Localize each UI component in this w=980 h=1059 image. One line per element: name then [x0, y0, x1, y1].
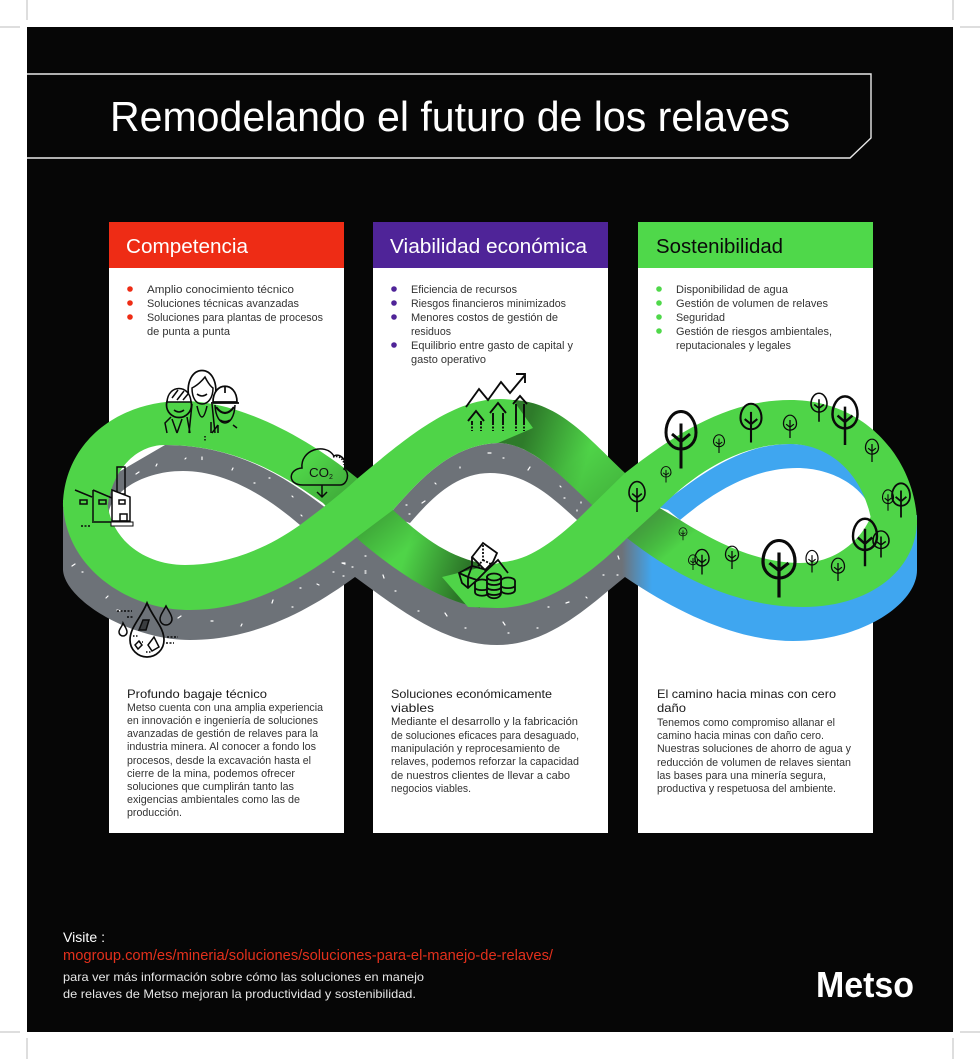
icon: growth chart — [466, 374, 527, 431]
bullet list: sostenibilidad: reputacionales y legales — [676, 340, 791, 352]
footer text: de relaves de Metso mejoran la productividad y sostenibilidad. — [63, 987, 416, 1001]
text block: soluciones economicamente viables — [391, 687, 579, 795]
footer text — [63, 930, 554, 1001]
text block: profundo bagaje: procesos, desde la excavación hasta el — [127, 755, 311, 767]
ribbon: white specks — [72, 453, 619, 633]
text block: soluciones economicamente viables: viables — [391, 701, 434, 715]
header: sostenibilidad — [638, 222, 873, 268]
bullet list: competencia: Amplio conocimiento técnico — [147, 284, 294, 296]
text block: camino hacia minas con cero dano: El camino hacia minas con cero — [657, 687, 836, 701]
title: Remodelando el futuro de los relaves — [110, 93, 790, 140]
bullet list: viabilidad: gasto operativo — [411, 354, 486, 366]
text block: profundo bagaje: industria minera. Al conocer a fondo los — [127, 741, 316, 753]
ribbon: green strip left loop falling — [63, 401, 480, 608]
header: competencia — [109, 222, 344, 268]
header: sostenibilidad: Sostenibilidad — [656, 236, 783, 258]
ribbon: green strip top arc falling to right loop — [498, 400, 917, 607]
ribbon: gray outer wall — [63, 507, 660, 645]
bullet list: viabilidad: residuos — [411, 326, 451, 338]
icon: people — [165, 370, 239, 442]
text block: soluciones economicamente viables: Soluciones económicamente — [391, 687, 552, 701]
icon: water drops with rocks — [117, 603, 178, 657]
text block: soluciones economicamente viables: negocios viables. — [391, 783, 471, 795]
text block: camino hacia minas con cero dano: productiva y respetuosa del ambiente. — [657, 783, 836, 795]
text block: soluciones economicamente viables: de nuestros clientes de llevar a cabo — [391, 770, 570, 782]
panel: sostenibilidad — [638, 222, 873, 833]
text block: camino hacia minas con cero dano: las bases para una minería segura, — [657, 770, 826, 782]
bullet list: sostenibilidad: Disponibilidad de agua — [676, 284, 789, 296]
text block: camino hacia minas con cero dano: daño — [657, 701, 686, 715]
icon: trees — [629, 393, 910, 598]
icon: CO2 cloud: CO — [309, 465, 329, 480]
text block: soluciones economicamente viables: de soluciones eficaces para desaguado, — [391, 730, 579, 742]
ribbon: gray inner wall middle — [385, 443, 600, 523]
text block: camino hacia minas con cero dano — [657, 687, 851, 795]
text block: profundo bagaje — [127, 687, 324, 819]
bullet list: viabilidad: Menores costos de gestión de — [411, 312, 558, 324]
bullet list: viabilidad: Equilibrio entre gasto de capital y — [411, 340, 573, 352]
icon: rocks and coins — [459, 543, 515, 598]
footer text: para ver más información sobre cómo las soluciones en manejo — [63, 970, 424, 984]
bullet list: competencia: Soluciones para plantas de procesos — [147, 312, 323, 324]
icon: CO2 cloud — [291, 449, 347, 497]
header: viabilidad economica — [373, 222, 608, 268]
text block: profundo bagaje: avanzadas de gestión de relaves para la — [127, 728, 319, 740]
bullet list: sostenibilidad: Gestión de volumen de relaves — [676, 298, 828, 310]
text block: profundo bagaje: producción. — [127, 807, 182, 819]
text block: soluciones economicamente viables: Mediante el desarrollo y la fabricación — [391, 716, 578, 728]
text block: profundo bagaje: en innovación e ingeniería de soluciones — [127, 715, 318, 727]
logo: Metso: Metso — [816, 964, 914, 1005]
bullet list: sostenibilidad: Seguridad — [676, 312, 725, 324]
ribbon: green strip bottom arc rising to right loop — [442, 400, 917, 608]
ribbon: green strip left loop rising — [63, 399, 533, 610]
footer text: Visite : — [63, 930, 105, 945]
text block: camino hacia minas con cero dano: Tenemos como compromiso allanar el — [657, 717, 835, 729]
bullet list: competencia — [127, 284, 323, 338]
header: viabilidad economica: Viabilidad económica — [390, 236, 588, 258]
text block: profundo bagaje: soluciones que cumplirán tanto las — [127, 781, 294, 793]
bullet list: viabilidad — [391, 284, 573, 366]
text block: profundo bagaje: cierre de la mina, podemos ofrecer — [127, 768, 295, 780]
bullet list: viabilidad: Eficiencia de recursos — [411, 284, 517, 296]
text block: soluciones economicamente viables: relaves, podemos reforzar la capacidad — [391, 756, 579, 768]
icon: factory — [75, 467, 133, 526]
header: competencia: Competencia — [126, 236, 249, 258]
text block: camino hacia minas con cero dano: reducción de volumen de relaves sientan — [657, 757, 851, 769]
bullet list: viabilidad: Riesgos financieros minimizados — [411, 298, 566, 310]
text block: profundo bagaje: exigencias ambientales como las de — [127, 794, 300, 806]
title box — [27, 74, 871, 158]
link url: mogroup.com/es/mineria/soluciones/soluciones-para-el-manejo-de-relaves/ — [63, 947, 554, 964]
ribbon: blue outer wall — [622, 515, 917, 641]
bullet list: sostenibilidad — [656, 284, 832, 352]
icon: CO2 cloud: 2 — [329, 474, 333, 481]
infinity ribbon — [63, 399, 917, 645]
text block: soluciones economicamente viables: manipulación y reprocesamiento de — [391, 743, 560, 755]
text block: profundo bagaje: Profundo bagaje técnico — [127, 687, 267, 701]
panel: competencia — [109, 222, 344, 833]
text block: profundo bagaje: Metso cuenta con una amplia experiencia — [127, 702, 324, 714]
panel: viabilidad economica — [373, 222, 608, 833]
bullet list: competencia: Soluciones técnicas avanzadas — [147, 298, 299, 310]
bullet list: sostenibilidad: Gestión de riesgos ambientales, — [676, 326, 832, 338]
ribbon: blue inner wall right — [658, 444, 878, 520]
ribbon: gray inner wall left — [105, 445, 335, 525]
text block: camino hacia minas con cero dano: Nuestras soluciones de ahorro de agua y — [657, 743, 851, 755]
text block: camino hacia minas con cero dano: camino hacia minas con daño cero. — [657, 730, 824, 742]
bullet list: competencia: de punta a punta — [147, 326, 231, 338]
